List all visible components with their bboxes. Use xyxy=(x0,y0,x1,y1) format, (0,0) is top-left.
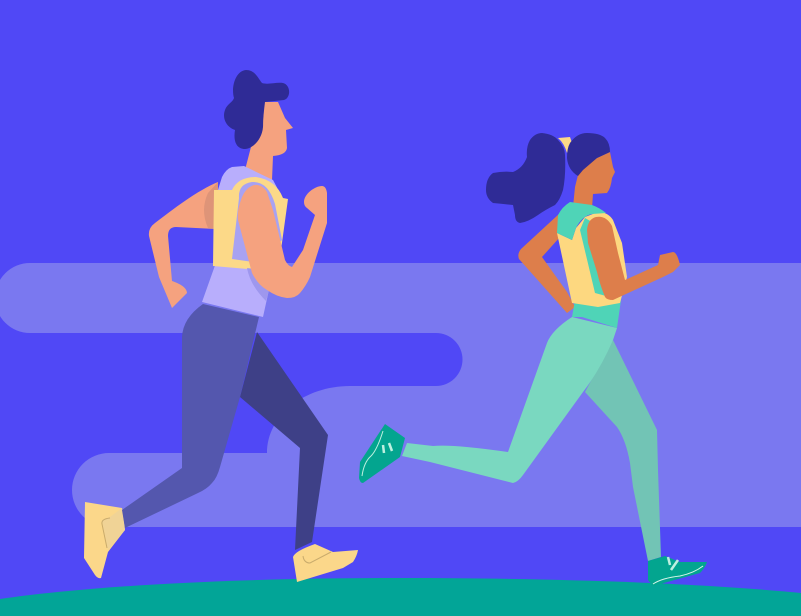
back leg xyxy=(240,332,328,550)
front shoe xyxy=(293,544,358,582)
front arm xyxy=(238,185,327,298)
cloud band xyxy=(0,263,801,527)
ground xyxy=(0,578,801,616)
back arm xyxy=(518,213,575,313)
back shoe xyxy=(84,502,125,578)
front leg xyxy=(122,304,259,528)
front leg xyxy=(402,317,617,483)
vest xyxy=(557,212,627,307)
shirt xyxy=(202,166,282,317)
scrunchie xyxy=(558,137,572,153)
flying shoe xyxy=(359,424,405,483)
figure: male runner xyxy=(84,70,358,582)
vest inner panel xyxy=(232,182,282,263)
neck and face xyxy=(245,102,293,180)
teal side strip xyxy=(580,218,606,296)
waist band xyxy=(572,300,621,328)
hair xyxy=(224,70,289,149)
neck and face xyxy=(573,152,615,214)
figure: female runner xyxy=(359,133,707,586)
back leg xyxy=(585,340,661,561)
back arm xyxy=(149,182,218,308)
front arm xyxy=(587,217,680,300)
planted shoe xyxy=(648,556,707,586)
ponytail xyxy=(486,133,565,223)
head hair xyxy=(567,133,610,176)
vest xyxy=(213,177,288,270)
shirt shade xyxy=(247,268,270,301)
top shoulder xyxy=(557,202,606,240)
